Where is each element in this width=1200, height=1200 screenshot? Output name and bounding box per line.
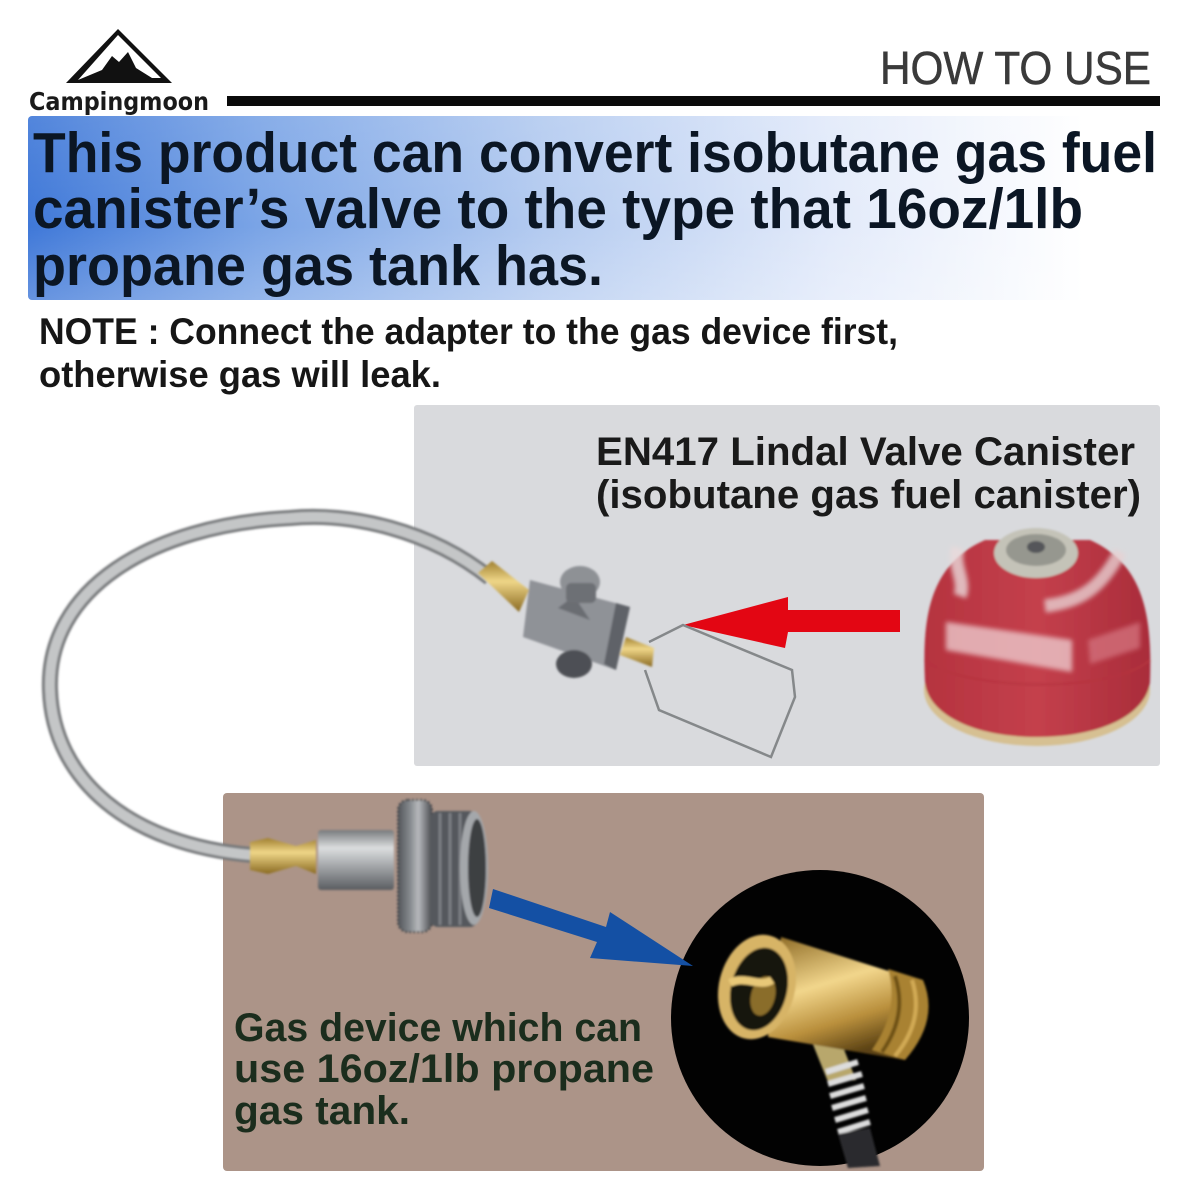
- banner: product description: propane gas tank has.: [33, 234, 603, 298]
- note text: [39, 311, 898, 395]
- panel text: gas device description: gas tank.: [234, 1089, 410, 1133]
- icon: brass propane fitting in black circle: [671, 870, 969, 1168]
- panel: gas device: [223, 793, 984, 1171]
- heading: how to use: HOW TO USE: [880, 42, 1151, 94]
- panel text: gas device description: use 16oz/1lb propane: [234, 1047, 654, 1091]
- panel: EN417 Lindal valve canister: [414, 405, 1160, 766]
- adapter hose with brass connectors: [50, 517, 795, 932]
- header rule: [227, 96, 1160, 106]
- arrow: red pointing to valve: [683, 597, 900, 648]
- banner: product description: [28, 116, 1175, 300]
- panel heading: canister type: [596, 430, 1141, 517]
- note text: NOTE : Connect the adapter to the gas device first,: [39, 311, 898, 352]
- panel text: gas device description: Gas device which can: [234, 1006, 642, 1050]
- arrow: blue pointing to fitting: [489, 889, 693, 966]
- logo: Campingmoon: Campingmoon: [29, 87, 209, 116]
- banner: product description: This product can convert isobutane gas fuel: [33, 121, 1157, 185]
- panel heading: canister type: EN417 Lindal Valve Canister: [596, 430, 1135, 474]
- banner: product description: canister’s valve to the type that 16oz/1lb: [33, 177, 1083, 241]
- braided hose: [50, 517, 490, 855]
- wire bail handle: [645, 625, 795, 757]
- panel heading: canister type: (isobutane gas fuel canister): [596, 473, 1141, 517]
- logo: Campingmoon: [29, 29, 209, 116]
- adapter top: valve block: [478, 561, 654, 678]
- note text: otherwise gas will leak.: [39, 354, 441, 395]
- panel text: gas device description: [234, 1006, 654, 1133]
- adapter bottom: threaded connector: [250, 800, 488, 932]
- icon: red gas canister: [924, 528, 1150, 746]
